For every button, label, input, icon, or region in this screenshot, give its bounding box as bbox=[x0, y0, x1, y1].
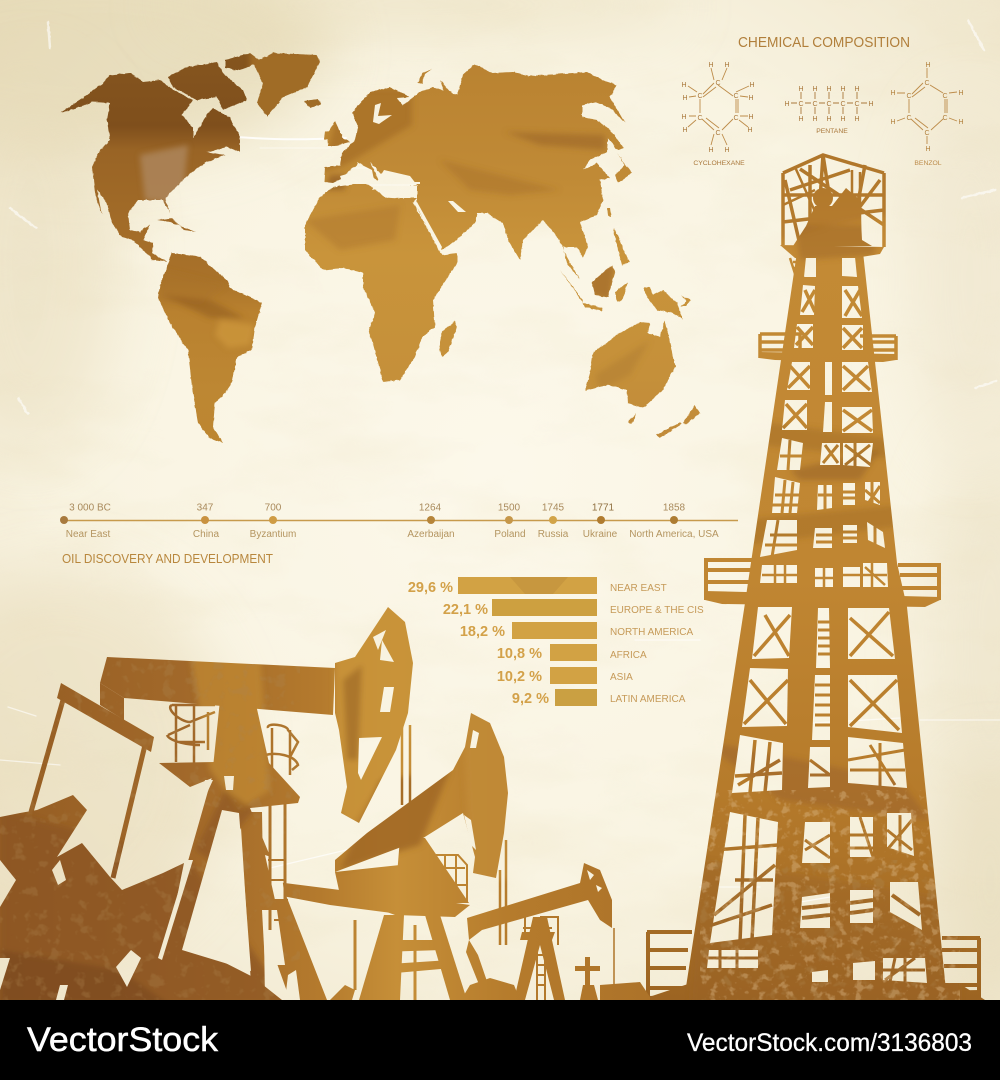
bar chart: regional shares bbox=[408, 577, 704, 707]
molecule: pentane: H bbox=[784, 101, 790, 108]
timeline years bbox=[69, 502, 686, 514]
molecule: pentane: H bbox=[840, 86, 846, 93]
cyclohexane label: CYCLOHEXANE bbox=[693, 160, 745, 167]
timeline places: Ukraine bbox=[583, 529, 618, 540]
molecule: benzol: H bbox=[958, 119, 964, 126]
bar labels: NORTH AMERICA bbox=[610, 627, 693, 638]
timeline places: Poland bbox=[494, 529, 526, 540]
molecule: pentane: H bbox=[868, 101, 874, 108]
molecule: cyclohexane: H bbox=[748, 95, 754, 102]
bar values: 18,2 % bbox=[460, 624, 505, 640]
molecule: pentane: H bbox=[798, 116, 804, 123]
molecule: benzol: H bbox=[958, 90, 964, 97]
molecule: benzol: C bbox=[942, 115, 948, 122]
molecule: cyclohexane: H bbox=[681, 114, 687, 121]
bar labels: ASIA bbox=[610, 672, 633, 683]
timeline places: Russia bbox=[538, 529, 569, 540]
oil derrick tower bbox=[640, 150, 985, 1010]
molecule: pentane: C bbox=[812, 101, 818, 108]
footer brand: VectorStock bbox=[27, 1021, 219, 1059]
molecule: cyclohexane: H bbox=[682, 95, 688, 102]
chemical composition title: CHEMICAL COMPOSITION bbox=[738, 35, 910, 51]
molecule: cyclohexane: H bbox=[681, 82, 687, 89]
timeline markers bbox=[60, 516, 678, 524]
molecule: cyclohexane: C bbox=[733, 115, 739, 122]
Eurasia and Africa land fill bbox=[300, 55, 710, 455]
molecule: pentane: H bbox=[854, 116, 860, 123]
bar labels: AFRICA bbox=[610, 650, 647, 661]
molecule: pentane: C bbox=[854, 101, 860, 108]
molecule: benzol: C bbox=[924, 80, 930, 87]
bar labels: EUROPE & THE CIS bbox=[610, 605, 704, 616]
bar labels bbox=[610, 583, 704, 705]
molecule: cyclohexane: H bbox=[749, 82, 755, 89]
footer url: VectorStock.com/3136803 bbox=[687, 1029, 972, 1057]
timeline places: Near East bbox=[66, 529, 110, 540]
timeline places: North America, USA bbox=[629, 529, 719, 540]
world map bbox=[55, 45, 710, 455]
molecule: cyclohexane: H bbox=[724, 147, 730, 154]
benzol label: BENZOL bbox=[914, 160, 942, 167]
timeline years: 1771 bbox=[592, 502, 615, 514]
timeline places bbox=[66, 529, 719, 540]
molecule: pentane: H bbox=[812, 86, 818, 93]
molecule: cyclohexane: C bbox=[715, 80, 721, 87]
bar labels: NEAR EAST bbox=[610, 583, 667, 594]
molecule: benzol: C bbox=[906, 93, 912, 100]
molecule: cyclohexane: C bbox=[697, 115, 703, 122]
molecule: benzol: H bbox=[925, 146, 931, 153]
molecule: benzol: C bbox=[942, 93, 948, 100]
molecule: benzol: H bbox=[890, 119, 896, 126]
pumpjacks silhouette group bbox=[0, 595, 660, 1005]
molecule: cyclohexane: H bbox=[747, 127, 753, 134]
timeline years: 3 000 BC bbox=[69, 502, 111, 514]
molecule: cyclohexane: H bbox=[708, 62, 714, 69]
bar values: 29,6 % bbox=[408, 580, 453, 596]
timeline places: Azerbaijan bbox=[407, 529, 455, 540]
molecule: cyclohexane: C bbox=[715, 130, 721, 137]
timeline places: China bbox=[193, 529, 219, 540]
footer bar bbox=[0, 1000, 1000, 1080]
Americas land fill bbox=[55, 45, 305, 450]
molecule: pentane: H bbox=[798, 86, 804, 93]
timeline years: 1500 bbox=[498, 502, 521, 514]
molecule: pentane: H bbox=[826, 86, 832, 93]
timeline years: 1858 bbox=[663, 502, 686, 514]
timeline heading: OIL DISCOVERY AND DEVELOPMENT bbox=[62, 552, 273, 566]
molecule: cyclohexane: H bbox=[748, 114, 754, 121]
bar values: 10,8 % bbox=[497, 646, 542, 662]
molecule: cyclohexane: H bbox=[708, 147, 714, 154]
bars bbox=[458, 577, 597, 706]
molecule: cyclohexane: C bbox=[733, 93, 739, 100]
molecule: pentane: H bbox=[826, 116, 832, 123]
molecule: pentane: H bbox=[812, 116, 818, 123]
bar values bbox=[408, 580, 549, 707]
molecule: pentane: H bbox=[854, 86, 860, 93]
molecule: pentane: H bbox=[840, 116, 846, 123]
molecule: cyclohexane: H bbox=[724, 62, 730, 69]
bar values: 10,2 % bbox=[497, 669, 542, 685]
timeline axis bbox=[62, 520, 738, 522]
molecule: cyclohexane bbox=[681, 62, 755, 167]
molecule: pentane: C bbox=[798, 101, 804, 108]
timeline years: 347 bbox=[197, 502, 214, 514]
timeline years: 1264 bbox=[419, 502, 442, 514]
molecule: cyclohexane: H bbox=[682, 127, 688, 134]
molecule: benzol: H bbox=[925, 62, 931, 69]
bar values: 9,2 % bbox=[512, 691, 549, 707]
molecule: pentane: C bbox=[840, 101, 846, 108]
timeline places: Byzantium bbox=[250, 529, 296, 540]
timeline bbox=[60, 502, 738, 540]
molecule: pentane: C bbox=[826, 101, 832, 108]
timeline years: 1745 bbox=[542, 502, 565, 514]
molecule: cyclohexane: C bbox=[697, 93, 703, 100]
timeline years: 700 bbox=[265, 502, 282, 514]
molecule: benzol: H bbox=[890, 90, 896, 97]
bar values: 22,1 % bbox=[443, 602, 488, 618]
molecule: pentane bbox=[784, 86, 874, 135]
bar labels: LATIN AMERICA bbox=[610, 694, 686, 705]
molecule: benzol bbox=[890, 62, 964, 167]
pentane label: PENTANE bbox=[816, 128, 848, 135]
molecule: benzol: C bbox=[924, 130, 930, 137]
molecule: benzol: C bbox=[906, 115, 912, 122]
